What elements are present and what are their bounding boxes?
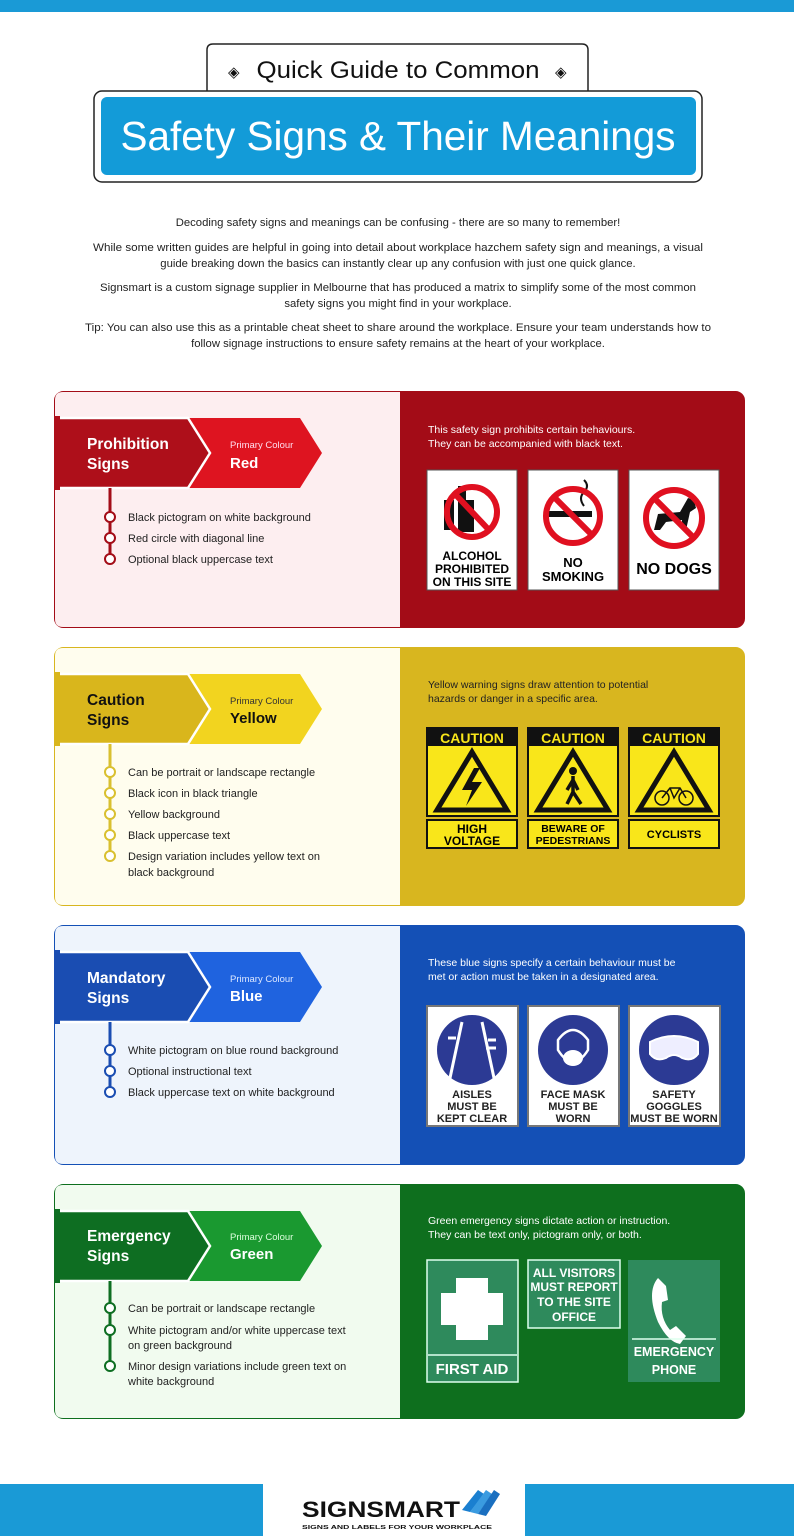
intro text: While some written guides are helpful in going into detail about workplace hazchem safety sign and meanings, a visual — [93, 242, 703, 254]
sign: goggles — [629, 1006, 720, 1126]
intro text: guide breaking down the basics can instantly clear up any confusion with just one quick glance. — [160, 258, 636, 270]
bullet list: caution: Black icon in black triangle — [128, 788, 258, 800]
bullet list: mandatory: White pictogram on blue round background — [128, 1045, 338, 1057]
main title: Safety Signs & Their Meanings — [120, 113, 676, 159]
panel: prohibition — [54, 392, 744, 628]
bullet list: emergency — [105, 1281, 346, 1388]
subtitle tab: ◈ — [555, 64, 567, 81]
description: mandatory: These blue signs specify a certain behaviour must be — [428, 957, 676, 969]
sign: all visitors: TO THE SITE — [537, 1295, 611, 1309]
intro text: Signsmart is a custom signage supplier in Melbourne that has produced a matrix to simplify some of the most common — [100, 282, 696, 294]
bullet list: caution: Black uppercase text — [128, 830, 230, 842]
bullet list: emergency: on green background — [128, 1340, 232, 1352]
sign: emergency phone — [628, 1260, 720, 1382]
ribbon: prohibition — [54, 416, 322, 490]
title block — [94, 44, 702, 182]
sign: high voltage: HIGH — [457, 822, 487, 836]
description: prohibition: They can be accompanied with black text. — [428, 438, 623, 450]
ribbon: emergency: Emergency — [87, 1228, 171, 1245]
sign: goggles: GOGGLES — [646, 1101, 702, 1113]
sign: alcohol prohibited — [427, 470, 517, 590]
description: emergency: Green emergency signs dictate action or instruction. — [428, 1215, 670, 1227]
subtitle tab — [207, 44, 588, 95]
bullet list: emergency: Can be portrait or landscape rectangle — [128, 1303, 315, 1315]
bullet list: prohibition: Optional black uppercase text — [128, 554, 273, 566]
description: caution — [428, 679, 648, 705]
sign: no smoking — [528, 470, 618, 590]
logo: signsmart — [302, 1490, 500, 1531]
ribbon: emergency: Signs — [87, 1248, 129, 1265]
ribbon: caution: Primary Colour — [230, 696, 293, 707]
description: prohibition: This safety sign prohibits certain behaviours. — [428, 424, 635, 436]
description: emergency: They can be text only, pictogram only, or both. — [428, 1229, 642, 1241]
ribbon: emergency: Primary Colour — [230, 1232, 293, 1243]
sign: face mask: FACE MASK — [541, 1089, 605, 1101]
sign: all visitors — [528, 1260, 620, 1328]
ribbon: prohibition: Red — [230, 455, 258, 472]
description: prohibition — [428, 424, 635, 450]
sign: pedestrians: CAUTION — [541, 730, 605, 746]
bullet list: mandatory: Black uppercase text on white background — [128, 1087, 335, 1099]
ribbon: caution: Caution — [87, 692, 145, 709]
sign: cyclists: CAUTION — [642, 730, 706, 746]
sign: high voltage: VOLTAGE — [444, 834, 500, 848]
sign: pedestrians — [528, 728, 618, 848]
sign: all visitors: OFFICE — [552, 1310, 596, 1324]
bullet list: prohibition: Red circle with diagonal line — [128, 533, 264, 545]
sign: face mask: MUST BE — [548, 1101, 598, 1113]
ribbon: emergency — [54, 1209, 322, 1283]
description: mandatory — [428, 957, 676, 983]
bullet list: caution — [105, 744, 320, 879]
sign: high voltage — [427, 728, 517, 848]
ribbon: mandatory: Signs — [87, 990, 129, 1007]
sign: pedestrians: BEWARE OF — [541, 823, 605, 835]
logo: signsmart: SIGNSMART — [302, 1497, 461, 1522]
ribbon: caution: Signs — [87, 712, 129, 729]
sign: no dogs: NO DOGS — [636, 561, 712, 578]
bullet list: caution: Yellow background — [128, 809, 220, 821]
footer bars — [0, 1484, 794, 1536]
sign: emergency phone: EMERGENCY — [634, 1345, 715, 1359]
bullet list: mandatory: Optional instructional text — [128, 1066, 252, 1078]
sign: face mask — [528, 1006, 619, 1126]
sign: all visitors: MUST REPORT — [530, 1280, 618, 1294]
ribbon: prohibition: Primary Colour — [230, 440, 293, 451]
bullet list: prohibition: Black pictogram on white background — [128, 512, 311, 524]
intro text: Tip: You can also use this as a printable cheat sheet to share around the workplace. Ensure your team understands how to — [85, 322, 711, 334]
bullet list: emergency: Minor design variations include green text on — [128, 1361, 346, 1373]
sign: first aid: FIRST AID — [436, 1361, 509, 1378]
description: caution: hazards or danger in a specific area. — [428, 693, 598, 705]
sign: alcohol prohibited: PROHIBITED — [435, 562, 509, 576]
description: caution: Yellow warning signs draw attention to potential — [428, 679, 648, 691]
description: mandatory: met or action must be taken in a designated area. — [428, 971, 659, 983]
sign: no dogs — [629, 470, 719, 590]
sign: cyclists: CYCLISTS — [647, 829, 701, 841]
ribbon: mandatory: Blue — [230, 988, 263, 1005]
logo: signsmart: SIGNS AND LABELS FOR YOUR WORKPLACE — [302, 1525, 493, 1531]
sign: aisles — [427, 1006, 518, 1126]
ribbon: prohibition: Prohibition — [87, 436, 169, 453]
sign: pedestrians: PEDESTRIANS — [536, 835, 610, 847]
ribbon: mandatory — [54, 950, 322, 1024]
intro text: Decoding safety signs and meanings can be confusing - there are so many to remember! — [176, 217, 620, 229]
intro text: safety signs you might find in your workplace. — [284, 298, 512, 310]
bullet list: caution: Can be portrait or landscape rectangle — [128, 767, 315, 779]
panel: caution — [54, 648, 744, 906]
bullet list: mandatory — [105, 1022, 338, 1099]
main title — [94, 91, 702, 182]
sign: face mask: WORN — [556, 1113, 590, 1125]
sign: no smoking: SMOKING — [542, 569, 604, 584]
description: emergency — [428, 1215, 670, 1241]
ribbon: emergency: Green — [230, 1246, 273, 1263]
ribbon: caution: Yellow — [230, 710, 277, 727]
ribbon: mandatory: Mandatory — [87, 970, 166, 987]
bullet list: caution: black background — [128, 867, 214, 879]
top bar — [0, 0, 794, 12]
sign: first aid — [427, 1260, 518, 1382]
intro text: follow signage instructions to ensure safety remains at the heart of your workplace. — [191, 338, 605, 350]
bullet list: emergency: White pictogram and/or white uppercase text — [128, 1325, 346, 1337]
panel: emergency — [54, 1184, 744, 1418]
subtitle tab: ◈ — [228, 64, 240, 81]
panel: mandatory — [54, 926, 744, 1164]
ribbon: mandatory: Primary Colour — [230, 974, 293, 985]
sign: alcohol prohibited: ON THIS SITE — [433, 575, 511, 589]
ribbon: prohibition: Signs — [87, 456, 129, 473]
sign: cyclists — [629, 728, 719, 848]
sign: alcohol prohibited: ALCOHOL — [442, 549, 502, 563]
sign: aisles: AISLES — [452, 1089, 492, 1101]
sign: aisles: MUST BE — [447, 1101, 497, 1113]
bullet list: emergency: white background — [127, 1376, 214, 1388]
subtitle tab: Quick Guide to Common — [256, 57, 540, 84]
bullet list: caution: Design variation includes yellow text on — [128, 851, 320, 863]
sign: no smoking: NO — [563, 555, 583, 570]
sign: emergency phone: PHONE — [652, 1363, 696, 1377]
sign: all visitors: ALL VISITORS — [533, 1266, 615, 1280]
sign: high voltage: CAUTION — [440, 730, 504, 746]
bullet list: prohibition — [105, 488, 311, 566]
sign: aisles: KEPT CLEAR — [437, 1113, 507, 1125]
ribbon: caution — [54, 672, 322, 746]
sign: goggles: SAFETY — [652, 1089, 696, 1101]
intro text — [85, 217, 711, 350]
sign: goggles: MUST BE WORN — [630, 1113, 718, 1125]
